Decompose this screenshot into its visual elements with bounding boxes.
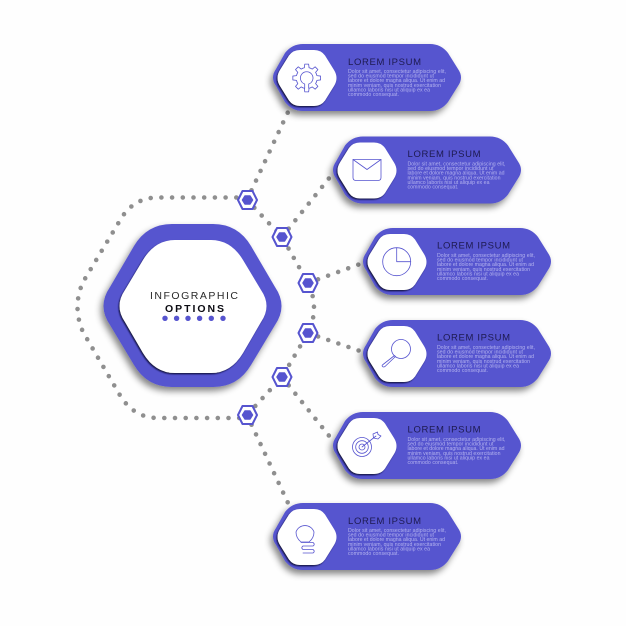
text block: [437, 253, 535, 282]
text block: labore et dolore magna aliqua. Ut enim ad: [437, 354, 534, 360]
panel: option 6: [273, 503, 461, 570]
text block: sed do eiusmod tempor incididunt ut: [348, 533, 435, 539]
text block: minim veniam, quis nostrud exercitation: [437, 267, 530, 273]
text block: ullamco laboris nisi ut aliquip ex ea: [348, 87, 430, 93]
text block: Dolor sit amet, consectetur adipiscing elit,: [348, 69, 446, 75]
text block: ullamco laboris nisi ut aliquip ex ea: [437, 271, 519, 277]
small hexagon nodes: [238, 191, 318, 424]
text block: Dolor sit amet, consectetur adipiscing elit,: [437, 253, 535, 259]
text block: [437, 345, 535, 374]
text block: labore et dolore magna aliqua. Ut enim ad: [348, 78, 445, 84]
heading: LOREM IPSUM: [437, 240, 510, 252]
text block: [348, 69, 446, 98]
text block: commodo consequat.: [437, 276, 488, 282]
text block: sed do eiusmod tempor incididunt ut: [437, 258, 524, 264]
text block: commodo consequat.: [408, 460, 458, 466]
heading: LOREM IPSUM: [348, 516, 421, 527]
text block: commodo consequat.: [408, 184, 458, 190]
text block: labore et dolore magna aliqua. Ut enim ad: [408, 446, 505, 452]
text block: labore et dolore magna aliqua. Ut enim ad: [408, 171, 505, 177]
text block: Dolor sit amet, consectetur adipiscing elit,: [408, 162, 506, 168]
text block: minim veniam, quis nostrud exercitation: [408, 451, 501, 457]
panel: option 5: [333, 412, 521, 479]
text block: commodo consequat.: [437, 368, 488, 374]
text block: labore et dolore magna aliqua. Ut enim ad: [348, 537, 445, 543]
icon: gear: [293, 64, 321, 92]
heading: LOREM IPSUM: [437, 332, 510, 344]
text block: [408, 437, 506, 466]
text block: minim veniam, quis nostrud exercitation: [348, 542, 441, 548]
central hexagon: infographic options: [104, 224, 282, 387]
text block: Dolor sit amet, consectetur adipiscing elit,: [348, 528, 446, 534]
text block: sed do eiusmod tempor incididunt ut: [408, 166, 494, 172]
dotted connector lines: [78, 112, 360, 503]
heading: LOREM IPSUM: [408, 424, 481, 436]
text block: minim veniam, quis nostrud exercitation: [408, 175, 501, 181]
heading: LOREM IPSUM: [408, 149, 481, 160]
text block: sed do eiusmod tempor incididunt ut: [408, 442, 494, 448]
icon: envelope: [353, 160, 381, 180]
text block: Dolor sit amet, consectetur adipiscing elit,: [437, 345, 535, 351]
icon: target: [352, 432, 381, 456]
text block: labore et dolore magna aliqua. Ut enim ad: [437, 262, 534, 268]
central hexagon: infographic options: INFOGRAPHIC: [150, 290, 238, 302]
text block: [408, 162, 506, 190]
text block: ullamco laboris nisi ut aliquip ex ea: [348, 546, 430, 552]
central hexagon: infographic options: OPTIONS: [165, 303, 224, 315]
panel: option 2: [333, 136, 521, 204]
text block: minim veniam, quis nostrud exercitation: [348, 83, 441, 89]
icon: pie chart: [383, 248, 411, 276]
panel: option 1: [273, 44, 461, 111]
icon: magnifier: [382, 340, 410, 367]
text block: minim veniam, quis nostrud exercitation: [437, 359, 530, 365]
panel: option 4: [363, 320, 551, 387]
text block: Dolor sit amet, consectetur adipiscing elit,: [408, 437, 506, 443]
heading: LOREM IPSUM: [348, 57, 421, 68]
text block: [348, 528, 446, 557]
text block: ullamco laboris nisi ut aliquip ex ea: [437, 363, 519, 369]
text block: ullamco laboris nisi ut aliquip ex ea: [408, 455, 490, 461]
text block: commodo consequat.: [348, 92, 399, 98]
panel: option 3: [363, 228, 551, 295]
text block: sed do eiusmod tempor incididunt ut: [437, 350, 524, 356]
icon: light bulb: [296, 526, 314, 553]
text block: sed do eiusmod tempor incididunt ut: [348, 74, 435, 80]
text block: commodo consequat.: [348, 551, 399, 557]
text block: ullamco laboris nisi ut aliquip ex ea: [408, 180, 490, 186]
